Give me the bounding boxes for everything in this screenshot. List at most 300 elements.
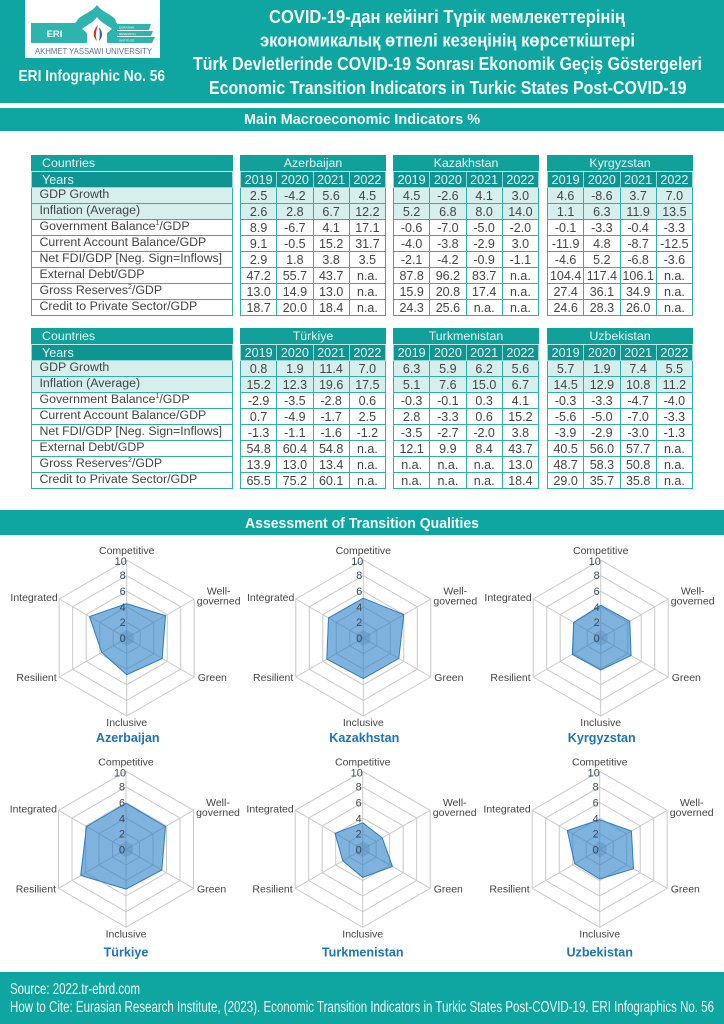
radar chart: Kazakhstan: Inclusive xyxy=(343,717,384,729)
radar chart: Kazakhstan: Competitive xyxy=(336,545,391,557)
table: Uzbekistan: 11.2 xyxy=(663,378,686,392)
table: Türkiye: 13.4 xyxy=(319,458,343,472)
radar chart: Türkiye: 0 xyxy=(119,844,125,856)
radar chart: Azerbaijan: 6 xyxy=(120,586,126,598)
table: Kyrgyzstan: Kyrgyzstan xyxy=(589,156,651,170)
table: Turkmenistan: 7.6 xyxy=(439,378,457,392)
radar chart: Kyrgyzstan: 2 xyxy=(594,617,600,629)
table: Kyrgyzstan: 5.2 xyxy=(593,253,611,267)
table: Kazakhstan: -3.8 xyxy=(437,237,459,251)
table: Turkmenistan: n.a. xyxy=(437,474,458,488)
table: Türkiye: 11.4 xyxy=(319,362,343,376)
radar chart: Azerbaijan: Integrated xyxy=(10,592,58,604)
table: Kazakhstan: -5.0 xyxy=(473,221,495,235)
table: Uzbekistan: -0.3 xyxy=(555,394,576,408)
table: Kyrgyzstan: -3.3 xyxy=(664,221,685,235)
table: Kyrgyzstan: 4.6 xyxy=(557,189,574,203)
table: Kyrgyzstan: -6.8 xyxy=(627,253,649,267)
table: Turkmenistan: 9.9 xyxy=(439,442,457,456)
table: Türkiye: 2021 xyxy=(317,346,345,360)
table: Kazakhstan: 14.0 xyxy=(508,205,533,219)
table: Kazakhstan: 83.7 xyxy=(472,269,496,283)
table: Azerbaijan: 18.4 xyxy=(319,301,343,315)
radar chart: Kyrgyzstan: Inclusive xyxy=(580,717,621,729)
table: Turkmenistan: 15.0 xyxy=(472,378,496,392)
table: Uzbekistan: -4.0 xyxy=(664,394,685,408)
table: Kyrgyzstan: 36.1 xyxy=(590,285,614,299)
logo: Akhmet Yassawi University ERI: EURASIAN xyxy=(119,26,134,30)
table: Kyrgyzstan: -0.1 xyxy=(555,221,576,235)
table: Kyrgyzstan: -3.3 xyxy=(591,221,613,235)
header band xyxy=(0,0,724,103)
table: Kyrgyzstan: -12.5 xyxy=(660,237,689,251)
table row labels, lower block: Countries xyxy=(42,329,95,343)
table: Kazakhstan: 87.8 xyxy=(399,269,424,283)
table: Kazakhstan: 15.9 xyxy=(399,285,424,299)
table: Kazakhstan: -2.9 xyxy=(473,237,495,251)
radar chart: Uzbekistan: governed xyxy=(670,807,714,819)
radar chart: Turkmenistan: Competitive xyxy=(335,756,391,768)
table: Uzbekistan: n.a. xyxy=(664,458,685,472)
table: Türkiye: 1.9 xyxy=(286,362,304,376)
table: Türkiye: -1.2 xyxy=(357,426,378,440)
table: Uzbekistan: 56.0 xyxy=(590,442,614,456)
radar chart: Kazakhstan: Resilient xyxy=(253,672,293,684)
table: Kazakhstan: 20.8 xyxy=(436,285,460,299)
table: Kazakhstan: 25.6 xyxy=(436,301,460,315)
radar chart: Kyrgyzstan: Kyrgyzstan xyxy=(568,731,636,745)
table: Kyrgyzstan xyxy=(547,155,693,316)
table: Kazakhstan: 2020 xyxy=(434,173,462,187)
table: Uzbekistan: -7.0 xyxy=(627,410,649,424)
table: Azerbaijan: 5.6 xyxy=(322,189,340,203)
table: Turkmenistan: 12.1 xyxy=(399,442,424,456)
table: Kazakhstan: 2019 xyxy=(398,173,426,187)
radar chart: Azerbaijan xyxy=(10,545,241,745)
table: Türkiye: 19.6 xyxy=(319,378,343,392)
table: Azerbaijan: 2.5 xyxy=(250,189,267,203)
table: Uzbekistan: 58.3 xyxy=(590,458,614,472)
radar chart: Kyrgyzstan: Well- xyxy=(681,586,705,598)
radar chart: Kyrgyzstan: Integrated xyxy=(484,592,532,604)
table: Azerbaijan: 18.7 xyxy=(246,301,271,315)
table: Türkiye: 0.6 xyxy=(359,394,376,408)
table: Kyrgyzstan: n.a. xyxy=(664,269,685,283)
radar chart: Kyrgyzstan xyxy=(484,545,715,745)
table: Turkmenistan: 2021 xyxy=(470,346,498,360)
footer: source and citation xyxy=(0,972,724,1024)
table: Kazakhstan: -2.1 xyxy=(401,253,422,267)
section heading: transition qualities: Assessment of Transition Qualities xyxy=(245,515,479,532)
table: Kazakhstan: 5.2 xyxy=(403,205,420,219)
table: Türkiye: 0.8 xyxy=(250,362,267,376)
radar chart: Kazakhstan: 2 xyxy=(356,617,362,629)
table: Uzbekistan: 10.8 xyxy=(626,378,650,392)
table: Uzbekistan: 5.5 xyxy=(666,362,683,376)
table: Turkmenistan: 5.6 xyxy=(512,362,529,376)
table: Uzbekistan: 2021 xyxy=(624,346,652,360)
table: Kyrgyzstan: -4.6 xyxy=(555,253,576,267)
table: Turkmenistan: 43.7 xyxy=(508,442,533,456)
radar chart: Azerbaijan: 8 xyxy=(120,570,126,582)
table: Kyrgyzstan: 104.4 xyxy=(550,269,581,283)
table: Azerbaijan: 3.5 xyxy=(359,253,376,267)
radar chart: Türkiye: 4 xyxy=(119,813,125,825)
table: Kazakhstan: n.a. xyxy=(510,269,531,283)
radar chart: Uzbekistan: Well- xyxy=(680,797,704,809)
logo: Akhmet Yassawi University ERI xyxy=(25,0,160,58)
title xyxy=(193,7,702,98)
radar chart: Turkmenistan: 0 xyxy=(356,844,362,856)
radar chart: Türkiye: Integrated xyxy=(10,803,57,815)
table: Türkiye: n.a. xyxy=(357,474,378,488)
section heading: macroeconomic indicators: Main Macroeconomic Indicators % xyxy=(244,111,480,128)
table: Türkiye: 2.5 xyxy=(359,410,376,424)
logo: Akhmet Yassawi University ERI: RESEARCH xyxy=(119,32,136,36)
table: Kazakhstan: n.a. xyxy=(510,285,531,299)
radar chart: Kazakhstan: governed xyxy=(433,596,477,608)
table: Uzbekistan: -3.0 xyxy=(627,426,649,440)
table: Azerbaijan: -0.5 xyxy=(284,237,306,251)
table: Azerbaijan: n.a. xyxy=(357,269,378,283)
table: Türkiye: -1.6 xyxy=(320,426,342,440)
table: Türkiye: n.a. xyxy=(357,458,378,472)
radar chart: Kazakhstan: 10 xyxy=(351,556,363,568)
title: экономикалық өтпелі кезеңінің көрсеткіштері xyxy=(260,30,635,50)
radar chart: Azerbaijan: 0 xyxy=(120,633,126,645)
table: Kazakhstan xyxy=(393,155,539,316)
table: Turkmenistan: 2020 xyxy=(434,346,462,360)
table: Azerbaijan: n.a. xyxy=(357,301,378,315)
radar chart: Türkiye: Green xyxy=(197,883,226,895)
radar chart: Azerbaijan: Competitive xyxy=(99,545,155,557)
table: Kazakhstan: -7.0 xyxy=(437,221,459,235)
table: Turkmenistan: 0.3 xyxy=(475,394,493,408)
table: Türkiye: 75.2 xyxy=(283,474,307,488)
table: Kyrgyzstan: -8.7 xyxy=(627,237,649,251)
table: Kazakhstan: n.a. xyxy=(474,301,495,315)
table: Kazakhstan: 4.5 xyxy=(403,189,420,203)
table: Kazakhstan: 2022 xyxy=(506,173,534,187)
table: Azerbaijan: 4.1 xyxy=(322,221,340,235)
table: Azerbaijan xyxy=(240,155,386,316)
table: Uzbekistan: -1.3 xyxy=(664,426,685,440)
table: Kyrgyzstan: 26.0 xyxy=(626,301,650,315)
table: Türkiye: -2.9 xyxy=(248,394,269,408)
table: Turkmenistan: 5.1 xyxy=(403,378,420,392)
radar chart: Kyrgyzstan: 0 xyxy=(594,633,600,645)
table: Kyrgyzstan: -8.6 xyxy=(591,189,613,203)
table: Uzbekistan: 2019 xyxy=(552,346,580,360)
logo: Akhmet Yassawi University ERI: AKHMET YASSAWI UNIVERSITY xyxy=(35,47,153,56)
table: Azerbaijan: 14.9 xyxy=(283,285,307,299)
table: Azerbaijan: 2.9 xyxy=(250,253,267,267)
radar chart: Azerbaijan: 10 xyxy=(115,556,127,568)
table: Kazakhstan: n.a. xyxy=(510,301,531,315)
table: Türkiye: -2.8 xyxy=(320,394,342,408)
table: Uzbekistan: 14.5 xyxy=(553,378,578,392)
radar chart: Azerbaijan: Green xyxy=(198,672,227,684)
table: Uzbekistan: -2.9 xyxy=(591,426,613,440)
radar chart: Türkiye: Resilient xyxy=(16,883,56,895)
table: Uzbekistan: 5.7 xyxy=(557,362,574,376)
radar chart: Kyrgyzstan: Resilient xyxy=(490,672,531,684)
radar chart: Azerbaijan: governed xyxy=(197,596,241,608)
table: Kazakhstan: -1.1 xyxy=(510,253,531,267)
table: Kyrgyzstan: 13.5 xyxy=(662,205,687,219)
table: Kazakhstan: -2.6 xyxy=(437,189,459,203)
table: Türkiye: 13.9 xyxy=(246,458,271,472)
table: Türkiye: -4.9 xyxy=(284,410,306,424)
table: Turkmenistan: 15.2 xyxy=(508,410,533,424)
radar chart: Uzbekistan: 2 xyxy=(593,828,599,840)
radar chart: Türkiye: governed xyxy=(196,807,240,819)
table: Kyrgyzstan: 4.8 xyxy=(593,237,611,251)
table: Kazakhstan: 3.0 xyxy=(512,237,529,251)
table: Uzbekistan: 50.8 xyxy=(626,458,650,472)
table: Turkmenistan: 2022 xyxy=(506,346,534,360)
table: Kazakhstan: -2.0 xyxy=(510,221,531,235)
section heading: transition qualities xyxy=(0,510,724,535)
radar chart: Türkiye: 8 xyxy=(119,781,125,793)
table: Azerbaijan: 15.2 xyxy=(319,237,343,251)
table: Kyrgyzstan: 3.7 xyxy=(629,189,647,203)
table: Turkmenistan: n.a. xyxy=(401,474,422,488)
table: Türkiye: 7.0 xyxy=(359,362,376,376)
table: Türkiye: 2020 xyxy=(281,346,309,360)
radar chart: Uzbekistan: Competitive xyxy=(572,756,628,768)
table: Kyrgyzstan: 2021 xyxy=(624,173,652,187)
table: Uzbekistan: Uzbekistan xyxy=(589,329,651,343)
table: Turkmenistan: -3.5 xyxy=(401,426,422,440)
table: Türkiye: -1.1 xyxy=(284,426,306,440)
table: Kyrgyzstan: -3.6 xyxy=(664,253,685,267)
radar chart: Kazakhstan xyxy=(247,545,477,745)
table: Kyrgyzstan: 1.1 xyxy=(557,205,574,219)
table: Turkmenistan: n.a. xyxy=(401,458,422,472)
table: Turkmenistan: 6.2 xyxy=(475,362,493,376)
table: Azerbaijan: 6.7 xyxy=(322,205,340,219)
radar chart: Türkiye xyxy=(10,756,240,959)
radar chart: Turkmenistan: Turkmenistan xyxy=(322,945,404,959)
radar chart: Türkiye: 6 xyxy=(119,797,125,809)
table: Kyrgyzstan: 24.6 xyxy=(553,301,578,315)
table: Kazakhstan: 2021 xyxy=(470,173,498,187)
table: Kyrgyzstan: 28.3 xyxy=(590,301,614,315)
table: Kyrgyzstan: -0.4 xyxy=(627,221,649,235)
table: Turkmenistan: n.a. xyxy=(474,458,495,472)
table: Azerbaijan: 2020 xyxy=(281,173,309,187)
table: Uzbekistan: -5.6 xyxy=(555,410,576,424)
table: Azerbaijan: n.a. xyxy=(357,285,378,299)
table: Azerbaijan: -6.7 xyxy=(284,221,306,235)
table: Azerbaijan: 13.0 xyxy=(246,285,271,299)
table: Azerbaijan: 9.1 xyxy=(250,237,267,251)
radar chart: Uzbekistan: Resilient xyxy=(489,883,530,895)
table: Turkmenistan: n.a. xyxy=(474,474,495,488)
radar chart: Kyrgyzstan: 4 xyxy=(594,602,600,614)
table: Azerbaijan: 31.7 xyxy=(355,237,380,251)
table: Türkiye: 60.1 xyxy=(319,474,343,488)
table: Turkmenistan: -0.1 xyxy=(437,394,459,408)
radar chart: Kazakhstan: 6 xyxy=(356,586,362,598)
table: Kazakhstan: -0.9 xyxy=(473,253,495,267)
radar chart: Kazakhstan: Integrated xyxy=(247,592,294,604)
radar chart: Uzbekistan: 4 xyxy=(593,813,599,825)
table: Turkmenistan: -3.3 xyxy=(437,410,459,424)
table: Turkmenistan: 6.7 xyxy=(512,378,529,392)
table: Azerbaijan: 3.8 xyxy=(322,253,340,267)
table: Kyrgyzstan: 7.0 xyxy=(666,189,683,203)
table: Azerbaijan: 2022 xyxy=(353,173,381,187)
table: Türkiye: 17.5 xyxy=(355,378,380,392)
table: Azerbaijan: 2019 xyxy=(245,173,273,187)
table: Turkmenistan: -0.3 xyxy=(401,394,422,408)
radar chart: Azerbaijan: Azerbaijan xyxy=(96,731,160,745)
table: Azerbaijan: 43.7 xyxy=(319,269,343,283)
table: Türkiye: 2022 xyxy=(353,346,381,360)
table: Turkmenistan: -2.7 xyxy=(437,426,459,440)
radar chart: Azerbaijan: Inclusive xyxy=(106,717,147,729)
radar chart: Kazakhstan: Well- xyxy=(443,586,468,598)
table: Azerbaijan: 20.0 xyxy=(283,301,307,315)
table: Kazakhstan: 17.4 xyxy=(472,285,496,299)
table: Türkiye: 54.8 xyxy=(246,442,271,456)
table: Azerbaijan: 55.7 xyxy=(283,269,307,283)
radar chart: Turkmenistan: Green xyxy=(434,883,463,895)
table: Azerbaijan: 47.2 xyxy=(246,269,271,283)
radar chart: Kyrgyzstan: 10 xyxy=(589,556,601,568)
table: Türkiye: 12.3 xyxy=(283,378,307,392)
table: Uzbekistan: 1.9 xyxy=(593,362,611,376)
table: Kyrgyzstan: 117.4 xyxy=(587,269,617,283)
table: Kyrgyzstan: 2019 xyxy=(552,173,580,187)
table: Kyrgyzstan: n.a. xyxy=(664,301,685,315)
radar chart: Turkmenistan: Inclusive xyxy=(342,928,383,940)
infographic number: ERI Infographic No. 56 xyxy=(18,68,165,85)
radar chart: Turkmenistan: 10 xyxy=(351,767,363,779)
radar chart: Türkiye: Competitive xyxy=(98,756,154,768)
table: Kyrgyzstan: 106.1 xyxy=(622,269,654,283)
table: Türkiye: 0.7 xyxy=(250,410,267,424)
table: Türkiye: -1.3 xyxy=(248,426,269,440)
table: Kazakhstan: 8.0 xyxy=(475,205,493,219)
table: Kazakhstan: -0.6 xyxy=(401,221,422,235)
table: Türkiye: -1.7 xyxy=(320,410,342,424)
radar chart: Uzbekistan: Green xyxy=(671,883,700,895)
table: Kazakhstan: 24.3 xyxy=(399,301,424,315)
table: Kyrgyzstan: 34.9 xyxy=(626,285,650,299)
table: Kazakhstan: Kazakhstan xyxy=(434,156,498,170)
footer: source and citation: Source: 2022.tr-ebrd.com xyxy=(10,981,140,998)
table: Azerbaijan: 2021 xyxy=(317,173,345,187)
table: Turkmenistan: 18.4 xyxy=(508,474,533,488)
table: Turkmenistan: 3.8 xyxy=(512,426,529,440)
radar chart: Uzbekistan: 0 xyxy=(593,844,599,856)
radar chart: Kazakhstan: Green xyxy=(434,672,464,684)
table: Kyrgyzstan: -11.9 xyxy=(552,237,579,251)
radar chart: Türkiye: Well- xyxy=(206,797,230,809)
table: Türkiye: 13.0 xyxy=(283,458,307,472)
radar chart: Turkmenistan: Well- xyxy=(443,797,467,809)
radar chart: Turkmenistan: governed xyxy=(433,807,477,819)
table: Turkmenistan xyxy=(393,328,539,489)
radar chart: Kazakhstan: 4 xyxy=(356,602,362,614)
title: COVID-19-дан кейінгі Түрік мемлекеттерінің xyxy=(269,7,625,27)
logo: Akhmet Yassawi University ERI: INSTITUTE xyxy=(119,38,134,42)
table: Azerbaijan: 13.0 xyxy=(319,285,343,299)
table: Türkiye: 2019 xyxy=(245,346,273,360)
table: Uzbekistan: 2022 xyxy=(660,346,688,360)
radar chart: Uzbekistan: Integrated xyxy=(483,803,531,815)
radar chart: Kyrgyzstan: Green xyxy=(672,672,701,684)
section heading: macroeconomic indicators xyxy=(0,108,724,131)
table: Turkmenistan: n.a. xyxy=(437,458,458,472)
table row labels, upper block: Countries xyxy=(42,156,95,170)
table: Kazakhstan: -4.2 xyxy=(437,253,459,267)
radar chart: Türkiye: Türkiye xyxy=(104,945,148,959)
table: Uzbekistan: n.a. xyxy=(664,442,685,456)
table: Turkmenistan: Turkmenistan xyxy=(429,329,503,343)
table: Uzbekistan: 40.5 xyxy=(553,442,578,456)
radar chart: Azerbaijan: Well- xyxy=(207,586,231,598)
table: Azerbaijan: 2.6 xyxy=(250,205,267,219)
radar chart: Türkiye: 10 xyxy=(114,767,126,779)
table row labels, upper block xyxy=(31,155,233,316)
table: Türkiye: n.a. xyxy=(357,442,378,456)
table: Türkiye: Türkiye xyxy=(293,329,333,343)
table: Uzbekistan: -3.9 xyxy=(555,426,576,440)
table: Kyrgyzstan: 11.9 xyxy=(626,205,650,219)
table: Uzbekistan: 29.0 xyxy=(553,474,578,488)
table: Turkmenistan: 2.8 xyxy=(403,410,420,424)
radar chart: Türkiye: Inclusive xyxy=(106,928,147,940)
radar chart: Kyrgyzstan: governed xyxy=(671,596,715,608)
radar chart: Uzbekistan xyxy=(483,756,714,959)
table: Kazakhstan: 4.1 xyxy=(475,189,493,203)
table: Uzbekistan: -3.3 xyxy=(664,410,685,424)
radar chart: Turkmenistan: 8 xyxy=(356,781,362,793)
table: Kyrgyzstan: 2020 xyxy=(588,173,616,187)
radar chart: Turkmenistan: 2 xyxy=(356,828,362,840)
radar chart: Uzbekistan: Uzbekistan xyxy=(566,945,633,959)
table: Azerbaijan: 12.2 xyxy=(355,205,380,219)
table: Turkmenistan: 4.1 xyxy=(512,394,529,408)
table: Uzbekistan: n.a. xyxy=(664,474,685,488)
table: Kazakhstan: 3.0 xyxy=(512,189,529,203)
table: Azerbaijan: 1.8 xyxy=(286,253,304,267)
table: Azerbaijan: 17.1 xyxy=(355,221,380,235)
table: Turkmenistan: -2.0 xyxy=(473,426,495,440)
table: Kazakhstan: -4.0 xyxy=(401,237,422,251)
table: Turkmenistan: 13.0 xyxy=(508,458,533,472)
table: Türkiye: -3.5 xyxy=(284,394,306,408)
table: Azerbaijan: 8.9 xyxy=(250,221,267,235)
table: Kyrgyzstan: 2022 xyxy=(660,173,688,187)
table: Kazakhstan: 6.8 xyxy=(439,205,457,219)
table: Uzbekistan: 35.8 xyxy=(626,474,650,488)
table: Türkiye: 54.8 xyxy=(319,442,343,456)
table: Azerbaijan: -4.2 xyxy=(284,189,306,203)
table: Turkmenistan: 6.3 xyxy=(403,362,420,376)
radar chart: Türkiye: 2 xyxy=(119,828,125,840)
logo: Akhmet Yassawi University ERI: ERI xyxy=(47,29,62,40)
radar chart: Turkmenistan: Resilient xyxy=(252,883,293,895)
table: Uzbekistan: 35.7 xyxy=(590,474,614,488)
table: Turkmenistan: 0.6 xyxy=(475,410,493,424)
table: Uzbekistan: -5.0 xyxy=(591,410,613,424)
table: Uzbekistan: -4.7 xyxy=(627,394,649,408)
